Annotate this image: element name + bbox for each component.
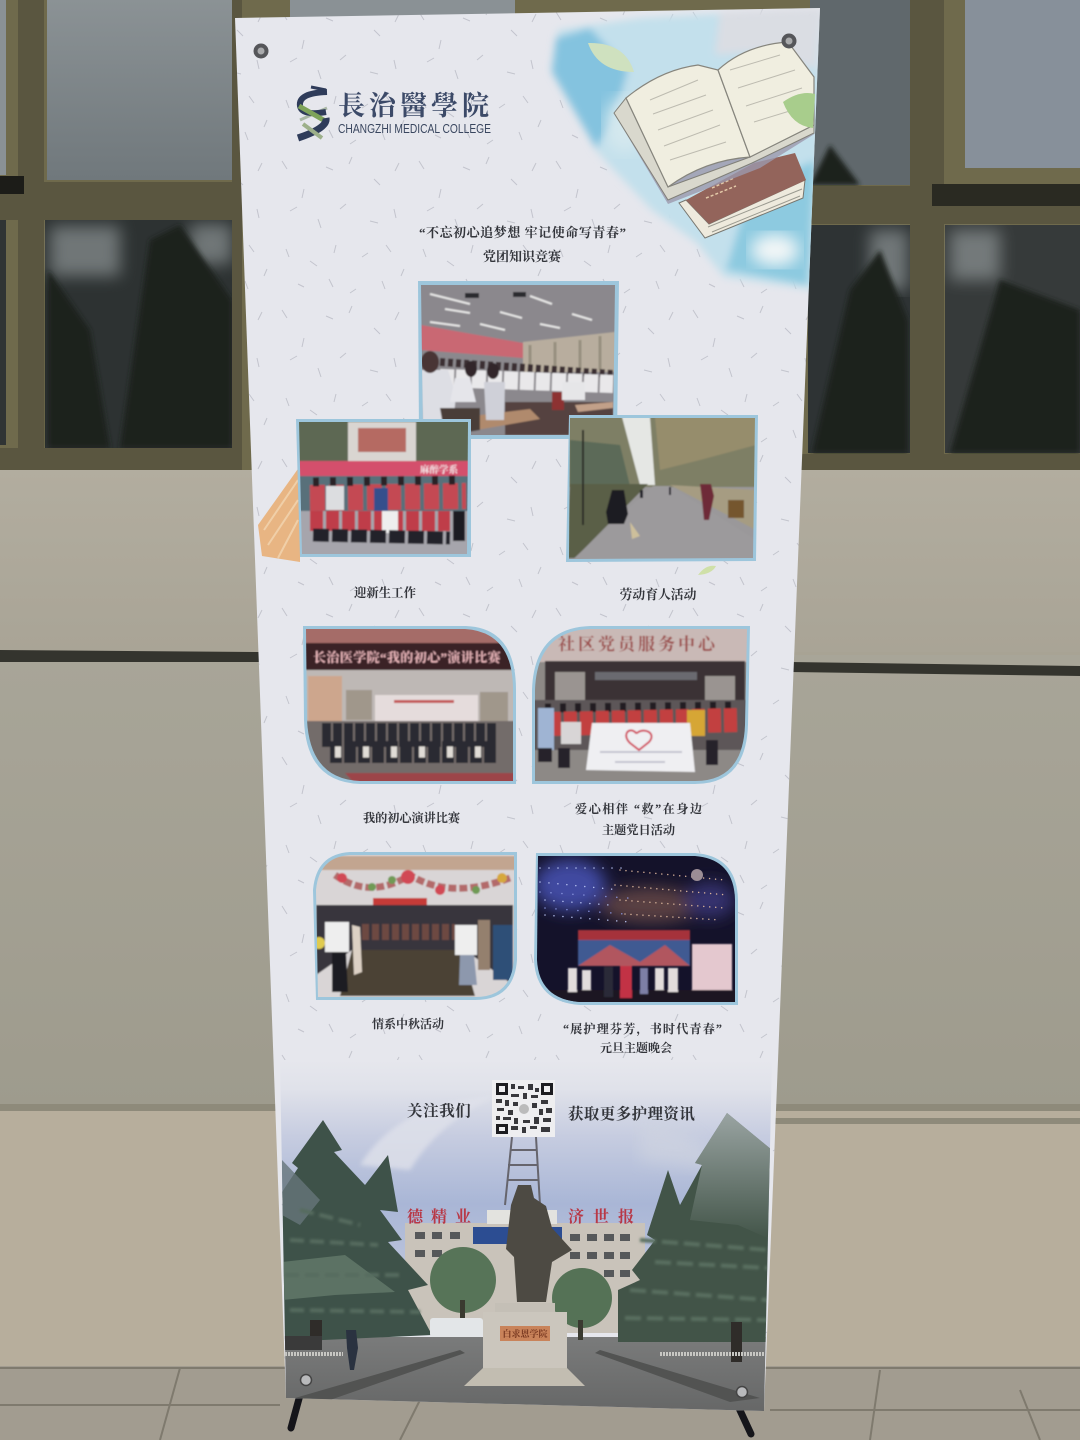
photo: party knowledge contest — [418, 281, 619, 439]
right pine tree — [618, 1113, 772, 1342]
crowd rows — [440, 362, 613, 374]
watercolor background behind books — [551, 8, 822, 290]
more info text: 获取更多护理资讯 — [568, 1104, 695, 1123]
statue pedestal — [552, 1303, 555, 1311]
icon: lower red book — [679, 153, 806, 238]
round trees — [430, 1247, 496, 1313]
caption: gala line two: 元旦主题晚会 — [600, 1040, 672, 1055]
front row — [310, 511, 450, 531]
photo: labour education activity — [566, 415, 758, 562]
icon: QR code — [492, 1080, 555, 1137]
photo: welcoming new students: 麻醉学系 — [420, 464, 459, 476]
caption: labour education: 劳动育人活动 — [620, 587, 697, 602]
heading: quiz subtitle: 党团知识竞赛 — [483, 249, 562, 264]
heading: quiz title: “不忘初心追梦想 牢记使命写青春” — [419, 225, 626, 240]
photo: New Year evening gala — [534, 853, 738, 1005]
icon: college logo — [298, 87, 327, 138]
transmission tower — [505, 1137, 540, 1205]
person — [346, 1330, 358, 1370]
caption: welcoming new students: 迎新生工作 — [354, 585, 417, 600]
pedestal inscription: 白求恩学院 — [502, 1328, 548, 1339]
left pine tree — [280, 1120, 432, 1342]
panel: poster banner — [235, 8, 822, 1412]
ground plaza — [282, 1337, 768, 1412]
caption: gala line one: “展护理芬芳，书时代青春” — [563, 1021, 722, 1036]
fences — [285, 1352, 765, 1356]
icon: mounting grommets — [254, 34, 796, 58]
building slogan: 德精业 — [407, 1207, 479, 1226]
icon: open book — [614, 42, 816, 204]
window panes — [0, 0, 1080, 453]
photo: my original aspiration speech contest — [303, 626, 516, 784]
follow text: 关注我们 — [407, 1101, 471, 1120]
logo text: Chinese name: 長治醫學院 — [338, 91, 493, 121]
statue — [506, 1185, 572, 1302]
photo: welcoming new students — [296, 419, 471, 559]
paper fibre texture — [235, 8, 820, 1411]
confetti — [540, 868, 728, 922]
foreground people — [422, 369, 456, 419]
frames — [0, 0, 1080, 478]
icon: leaf — [588, 43, 634, 72]
back row — [310, 496, 466, 498]
caption: love activity line two: 主题党日活动 — [602, 822, 675, 837]
caption: love activity line one: 爱心相伴 “救”在身边 — [574, 801, 702, 816]
photo: party day activity: 社区党员服务中心 — [558, 634, 718, 654]
photo: my original aspiration speech contest: 长治医学院“我的初心”演讲比赛 — [313, 650, 502, 665]
building slogan right: 济世报 — [568, 1207, 643, 1226]
coach bus — [430, 1318, 483, 1337]
banner stand feet — [291, 1395, 751, 1434]
panel: campus scene — [278, 1060, 774, 1412]
main building — [405, 1223, 645, 1333]
icon: orange paper fan — [258, 466, 300, 562]
stone wall — [0, 470, 1080, 1110]
icon: small green leaf — [698, 566, 716, 575]
ground and pavement — [0, 1104, 1080, 1440]
caption: speech contest: 我的初心演讲比赛 — [363, 810, 461, 825]
sky reflections — [50, 224, 1000, 290]
caption: mid-autumn: 情系中秋活动 — [372, 1016, 444, 1031]
photo: mid-autumn activity — [313, 852, 517, 1000]
photo: party day activity — [532, 626, 750, 784]
icon: lower grommets — [300, 1374, 748, 1398]
tree reflections — [48, 145, 1080, 453]
building facade with windows — [0, 0, 1080, 478]
logo text: English name: CHANGZHI MEDICAL COLLEGE — [338, 121, 491, 136]
